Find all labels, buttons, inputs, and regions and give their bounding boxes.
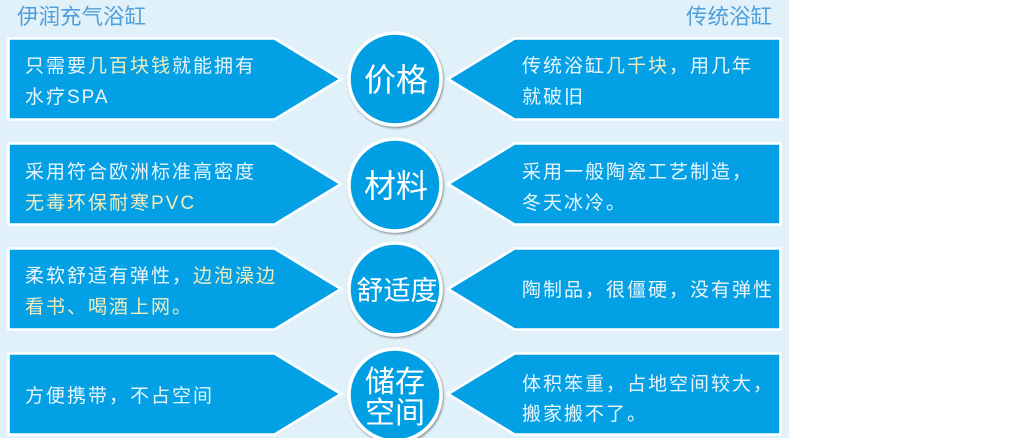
circle label: comfort: 舒适度	[356, 276, 438, 306]
left text: comfort: 看书、喝酒上网。	[25, 296, 193, 318]
right arrow panel: material	[448, 144, 780, 224]
left arrow panel: price	[8, 38, 341, 120]
circle label: price: 价格	[364, 62, 428, 98]
left arrow panel: material	[8, 144, 341, 224]
circle: price	[349, 33, 441, 125]
circle label: material: 材料	[364, 168, 428, 204]
right arrow panel: comfort	[448, 248, 780, 330]
left text: price: 只需要几百块钱就能拥有	[25, 56, 256, 77]
background panel	[0, 0, 789, 438]
right text: material: 采用一般陶瓷工艺制造，	[522, 162, 753, 183]
circle: storage	[349, 349, 441, 438]
row: price	[8, 33, 780, 125]
heading: right column: 传统浴缸	[686, 5, 772, 29]
right text: comfort: 陶制品，很僵硬，没有弹性	[522, 279, 774, 301]
left text: material: 无毒环保耐寒PVC	[25, 192, 196, 214]
circle: comfort	[349, 243, 441, 335]
right text: storage: 搬家搬不了。	[522, 403, 648, 425]
row: storage	[8, 349, 780, 438]
left arrow panel: comfort	[8, 248, 341, 330]
left text: price: 水疗SPA	[25, 86, 110, 108]
right arrow panel: price	[448, 38, 780, 120]
left arrow panel: storage	[8, 354, 341, 434]
right text: price: 传统浴缸几千块，用几年	[522, 56, 753, 77]
left text: storage: 方便携带，不占空间	[25, 385, 214, 407]
left text: comfort: 柔软舒适有弹性，边泡澡边	[25, 266, 277, 287]
right text: price: 就破旧	[522, 86, 585, 108]
circle: material	[349, 139, 441, 231]
heading: left column: 伊润充气浴缸	[17, 5, 146, 29]
row: comfort	[8, 243, 780, 335]
circle label: storage: 空间	[365, 397, 425, 430]
row: material	[8, 139, 780, 231]
circle label: storage: 储存	[365, 366, 425, 399]
right arrow panel: storage	[448, 354, 780, 434]
left text: material: 采用符合欧洲标准高密度	[25, 162, 256, 183]
right text: storage: 体积笨重，占地空间较大，	[522, 374, 774, 395]
right text: material: 冬天冰冷。	[522, 192, 627, 214]
